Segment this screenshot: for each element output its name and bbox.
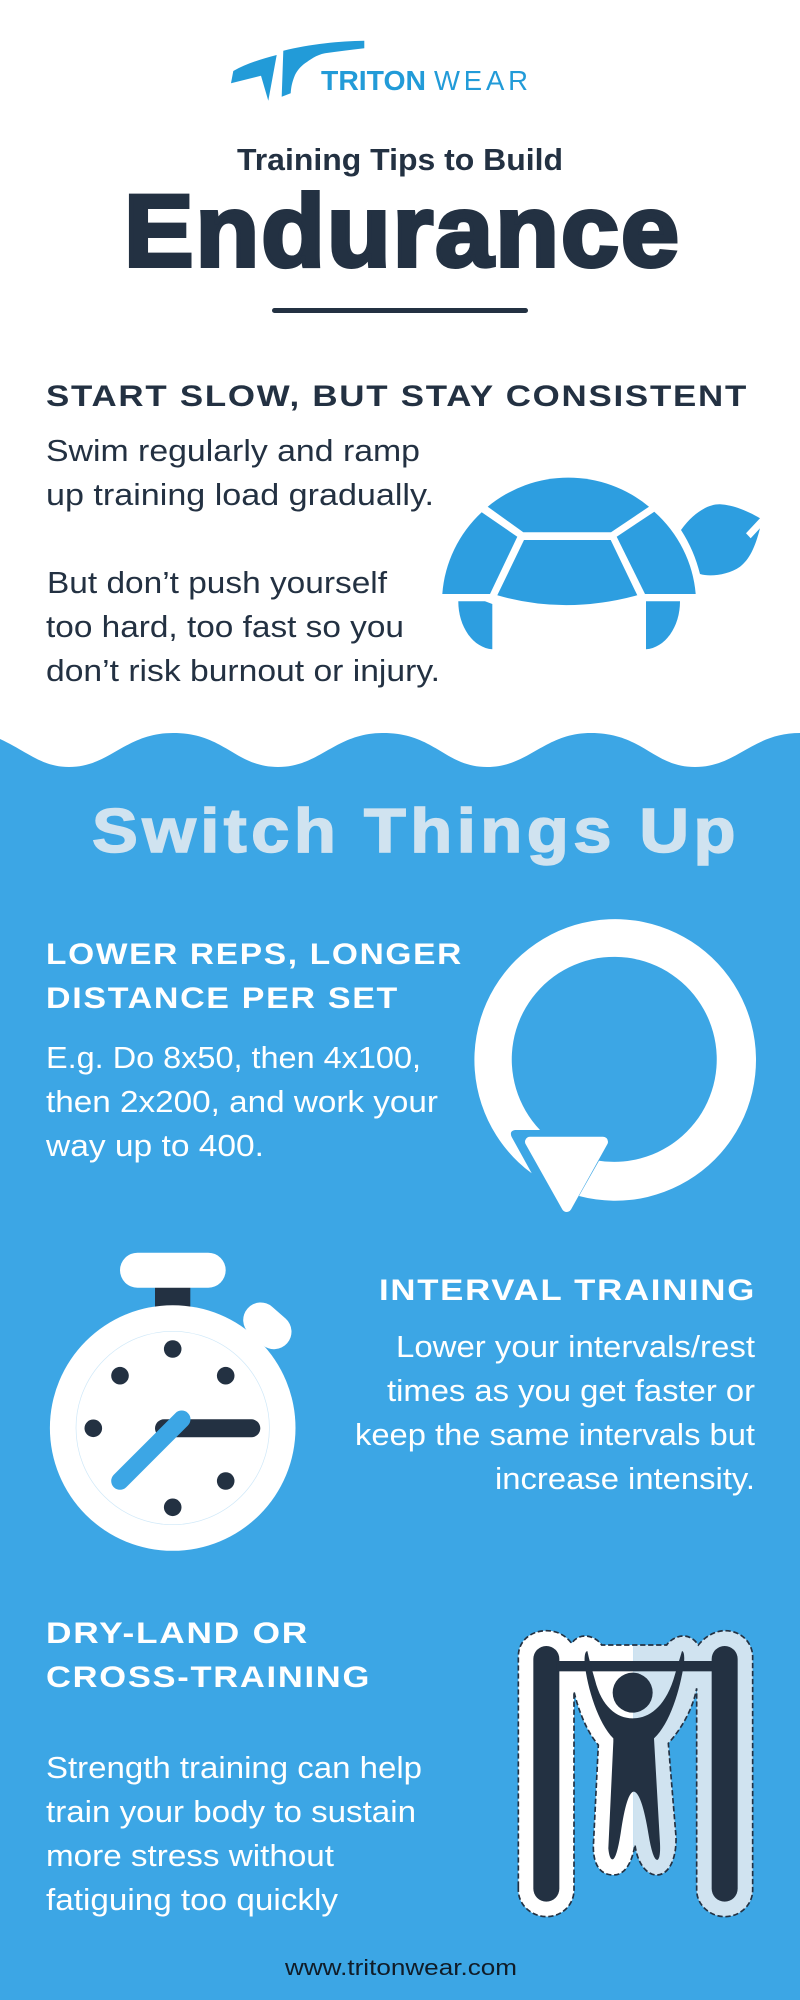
logo text (321, 65, 528, 96)
stopwatch blue hand (120, 1419, 182, 1481)
heading: START SLOW, BUT STAY CONSISTENT (46, 380, 748, 413)
text block: then 2x200, and work your (46, 1085, 438, 1119)
panel: start slow (46, 380, 760, 688)
subtitle: Training Tips to Build (237, 142, 563, 177)
icon: circular arrow (474, 919, 756, 1207)
text block: up training load gradually. (46, 478, 434, 512)
heading: CROSS-TRAINING (46, 1661, 371, 1694)
text block (46, 434, 440, 688)
text block (46, 1751, 422, 1917)
icon: turtle (442, 478, 760, 649)
stopwatch side button (261, 1320, 274, 1332)
stopwatch dark hand (164, 1419, 251, 1437)
text block: keep the same intervals but (355, 1418, 756, 1452)
text block: way up to 400. (45, 1129, 264, 1163)
heading: INTERVAL TRAINING (379, 1274, 756, 1307)
icon: logo mark (231, 41, 364, 101)
pull-up figure (533, 1646, 738, 1902)
title underline (272, 308, 528, 313)
text block: Lower your intervals/rest (396, 1330, 756, 1364)
section heading: switch things up: Switch Things Up (92, 797, 740, 866)
stopwatch top button (120, 1253, 226, 1288)
logo text: WEAR (434, 65, 528, 96)
heading (46, 1617, 371, 1694)
icon: stopwatch (50, 1253, 296, 1551)
sticker dashed outline (518, 1631, 753, 1917)
panel: dry-land (46, 1617, 753, 1917)
footer url: www.tritonwear.com (284, 1955, 517, 1980)
stopwatch body (50, 1305, 296, 1551)
text block: increase intensity. (495, 1462, 755, 1496)
sticker light-blue half (633, 1630, 753, 1917)
sticker white half (518, 1630, 634, 1917)
heading: DISTANCE PER SET (46, 982, 399, 1015)
text block: train your body to sustain (46, 1795, 416, 1829)
text block (45, 1041, 438, 1163)
text block: more stress without (46, 1839, 335, 1873)
panel: interval training (50, 1253, 756, 1551)
text block: Swim regularly and ramp (46, 434, 420, 468)
icon: pull-up sticker (518, 1631, 753, 1917)
heading: LOWER REPS, LONGER (46, 938, 463, 971)
background wave: blue water section (0, 733, 800, 2000)
text block: fatiguing too quickly (46, 1883, 339, 1917)
title: Endurance (124, 174, 681, 288)
text block (355, 1330, 756, 1496)
heading: DRY-LAND OR (46, 1617, 309, 1650)
logo: TritonWear (231, 41, 528, 101)
panel: lower reps (45, 919, 756, 1207)
stopwatch dots (84, 1340, 234, 1516)
logo text: TRITON (321, 65, 426, 96)
text block: But don’t push yourself (47, 566, 388, 600)
text block: don’t risk burnout or injury. (46, 654, 440, 688)
text block: Strength training can help (46, 1751, 422, 1785)
heading (46, 938, 463, 1015)
stopwatch face (76, 1331, 269, 1525)
stopwatch stem (155, 1285, 190, 1315)
text block: too hard, too fast so you (46, 610, 404, 644)
text block: E.g. Do 8x50, then 4x100, (46, 1041, 421, 1075)
text block: times as you get faster or (387, 1374, 755, 1408)
